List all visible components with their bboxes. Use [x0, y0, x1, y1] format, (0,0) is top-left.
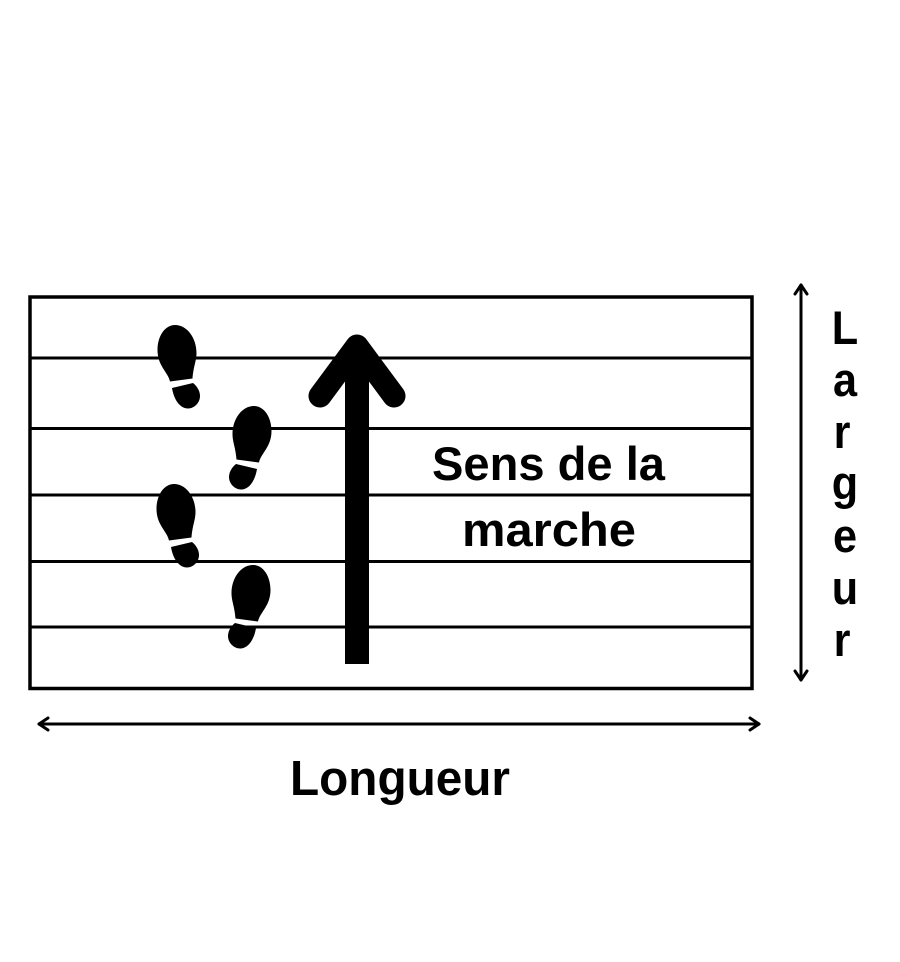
icon: footprints — [156, 325, 272, 648]
arrow: walking direction — [320, 346, 394, 664]
label: Largeur (vertical): L — [832, 301, 858, 354]
label: Largeur (vertical) — [832, 301, 858, 666]
label: Largeur (vertical): a — [833, 353, 858, 406]
footprint 3 — [156, 484, 199, 568]
label: Sens de la marche: Sens de la — [432, 437, 666, 490]
label: Sens de la marche: marche — [462, 503, 636, 556]
label: Largeur (vertical): u — [832, 561, 858, 614]
footprint 2 — [229, 406, 272, 490]
label: Largeur (vertical): g — [832, 456, 858, 509]
label: Longueur: Longueur — [290, 752, 510, 806]
label: Largeur (vertical): e — [833, 509, 857, 562]
arrow: width dimension — [795, 285, 807, 680]
footprint 4 — [228, 565, 270, 648]
footprint 1 — [158, 325, 200, 408]
arrow: length dimension — [39, 718, 759, 730]
floor plan rectangle with boards — [30, 297, 752, 688]
label: Largeur (vertical): r — [834, 613, 850, 666]
label: Sens de la marche — [432, 437, 666, 556]
label: Largeur (vertical): r — [834, 405, 850, 458]
